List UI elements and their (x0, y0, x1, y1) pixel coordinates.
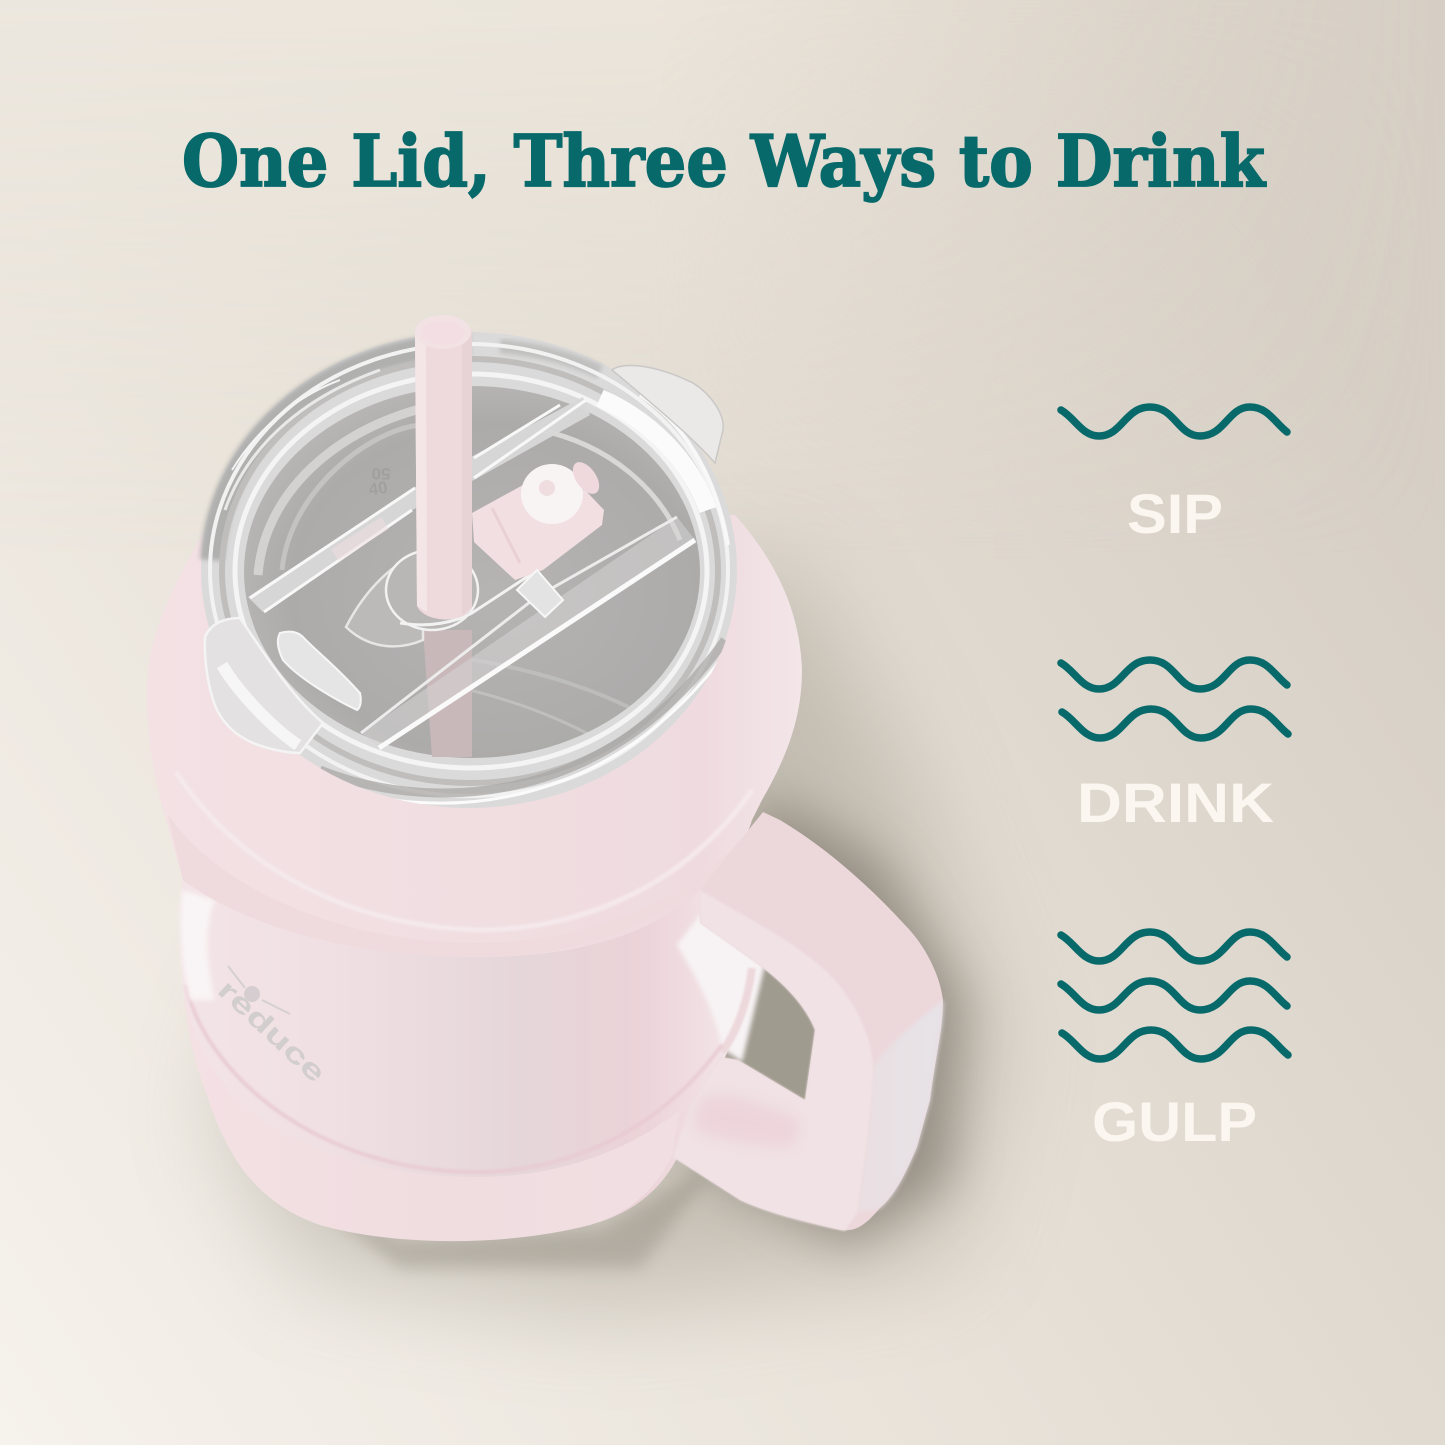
mug shadow (220, 560, 1000, 1310)
stopper knob (521, 464, 583, 524)
label: drink: DRINK (1077, 771, 1274, 834)
sip icon and label (1061, 407, 1287, 545)
lid rim dark arc (212, 345, 470, 560)
logo (212, 966, 332, 1088)
lid drink opening (278, 632, 361, 710)
measure marks (367, 464, 390, 499)
mug (147, 315, 943, 1241)
inner rings (258, 400, 690, 760)
left highlight (180, 890, 215, 1000)
wave icon: gulp (1061, 932, 1288, 1059)
slider rounded outline (400, 573, 533, 625)
wave icon: drink (1061, 660, 1288, 738)
handle front face (673, 890, 873, 1231)
wave icon: sip (1061, 407, 1287, 436)
stopper hole (539, 480, 555, 496)
measure marks: 40 (367, 478, 389, 499)
handle (673, 812, 943, 1231)
stopper nub (567, 458, 605, 498)
handle right side (857, 1000, 943, 1213)
straw (415, 315, 472, 620)
lid (201, 332, 737, 808)
upper slider bar (248, 397, 590, 612)
gasket stopper (472, 458, 605, 580)
shoulder crease (176, 772, 752, 930)
lug bright band (222, 665, 298, 745)
lid lug left (205, 618, 323, 753)
lid rim highlights (210, 344, 735, 803)
straw seen through lid (423, 630, 472, 757)
body edge ring (722, 968, 752, 1052)
base band crease (186, 985, 722, 1172)
base band (183, 980, 680, 1241)
label: gulp: GULP (1092, 1090, 1257, 1153)
shoulder (147, 515, 802, 957)
body white patch (677, 915, 765, 1062)
handle inner shade (692, 1095, 800, 1146)
straw opening leaf (346, 550, 423, 646)
handle silhouette (673, 812, 943, 1230)
gulp icon and label (1061, 932, 1288, 1153)
lid outer rim (201, 332, 737, 808)
handle opening (730, 967, 815, 1105)
title: One Lid, Three Ways to Drink (182, 119, 1267, 203)
shoulder lower shade (168, 815, 745, 957)
measure marks: 50 (372, 464, 390, 483)
straw base ring (386, 550, 478, 630)
label: sip: SIP (1127, 482, 1223, 545)
clear hinge (517, 570, 563, 617)
lower body (180, 860, 750, 1240)
inner window (244, 386, 700, 758)
logo: reduce (212, 974, 332, 1088)
plate crease (492, 508, 520, 563)
stopper plate (472, 485, 604, 580)
drink icon and label (1061, 660, 1288, 834)
lower slider bar (361, 517, 695, 747)
lid tab right (612, 365, 723, 463)
